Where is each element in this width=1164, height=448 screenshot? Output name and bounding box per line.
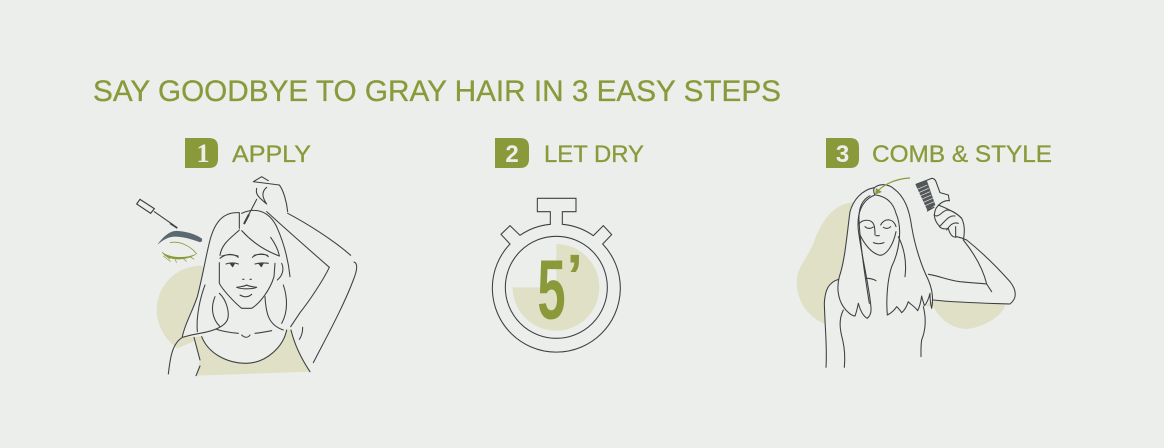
green arrow (875, 178, 910, 195)
beige blob (797, 202, 1005, 329)
comb teeth (916, 180, 935, 211)
hair, body and arm lines (824, 178, 1015, 367)
inner ring (505, 236, 607, 338)
eyes (226, 263, 268, 264)
step 2 heading: LET DRY (544, 141, 644, 168)
illustration: woman applying product (137, 177, 357, 376)
step 1 badge: 1 (196, 139, 210, 168)
title: SAY GOODBYE TO GRAY HAIR IN 3 EASY STEPS (93, 75, 781, 108)
beige timer wedge (513, 244, 599, 331)
closed eye with green lashes (162, 242, 197, 263)
step 1 panel: apply (137, 138, 357, 376)
stopwatch (492, 198, 620, 352)
five minutes numeral: 5 (537, 242, 566, 337)
figure mask (824, 185, 1015, 367)
step 1 heading: APPLY (232, 141, 311, 168)
step 3 badge: 3 (836, 141, 849, 168)
hair and skin mask (182, 212, 329, 337)
applicator wand (137, 199, 177, 228)
illustration: woman combing hair (797, 178, 1015, 367)
minutes mark: ’ (566, 243, 583, 310)
step 3 heading: COMB & STYLE (872, 141, 1052, 168)
eyebrow detail (157, 231, 202, 245)
nose and mouth (243, 278, 251, 281)
hair, face and arm lines (168, 177, 357, 376)
step 1 badge (185, 138, 218, 168)
stopwatch outline (492, 198, 620, 352)
step 2 panel: let dry (492, 138, 644, 352)
step 3 panel: comb and style (797, 138, 1052, 367)
beige blob (157, 266, 220, 348)
step 2 badge (495, 138, 529, 168)
tank top (194, 329, 310, 376)
eyebrows (220, 254, 238, 258)
step 3 badge (826, 138, 859, 168)
step 2 badge: 2 (505, 141, 519, 168)
